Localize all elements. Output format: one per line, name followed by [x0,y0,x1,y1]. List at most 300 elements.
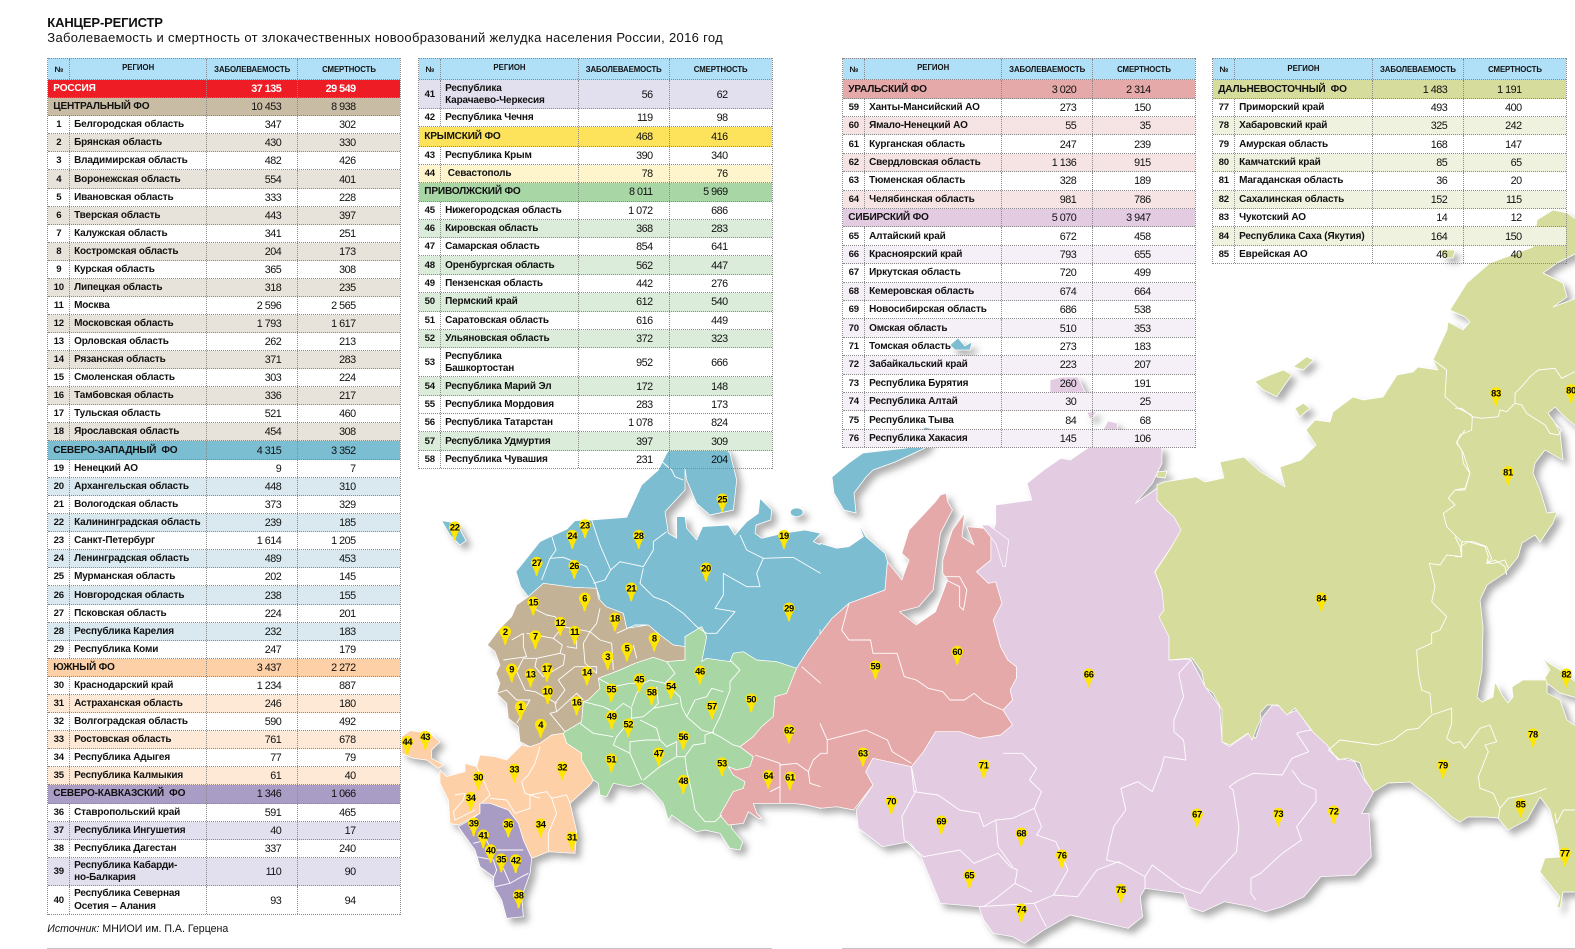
table: Russia, Central, Northwest, South, North Caucasus: 240 [339,843,356,855]
table: North Caucasus end, Crimea, Volga: 52 [425,333,435,344]
table: North Caucasus end, Crimea, Volga: 119 [637,112,653,124]
pin 22 [449,521,460,540]
table: Far East: 152 [1431,194,1447,206]
pin 68 [1016,827,1027,846]
pin 34 east: 34 [536,819,547,830]
heading: Crimean federal district: 416 [711,131,728,143]
table: Russia, Central, Northwest, South, North Caucasus: 24 [54,553,64,564]
column headers: РЕГИОН [917,63,949,72]
table: Russia, Central, Northwest, South, North Caucasus: 17 [54,408,64,419]
table: Ural and Siberia: Красноярский край [869,249,962,260]
table: North Caucasus end, Crimea, Volga: 1 072 [628,205,653,217]
table: North Caucasus end, Crimea, Volga: 686 [711,205,728,217]
table: Russia, Central, Northwest, South, North Caucasus: 1 234 [257,680,281,692]
table: Russia, Central, Northwest, South, North Caucasus: 37 [54,825,64,836]
table: North Caucasus end, Crimea, Volga: 442 [636,278,653,290]
table: Far East: Амурская область [1239,139,1328,150]
table: Russia, Central, Northwest, South, North Caucasus: 489 [265,553,281,565]
table: Russia, Central, Northwest, South, North Caucasus: 262 [265,336,281,348]
table: Ural and Siberia: 672 [1060,231,1076,243]
table: Russia, Central, Northwest, South, North Caucasus: 283 [339,354,356,366]
column headers [843,58,1195,80]
pin 8 [648,632,660,651]
table: North Caucasus end, Crimea, Volga: 43 [425,150,435,161]
table: Russia, Central, Northwest, South, North Caucasus: 40 [345,770,356,782]
pin 61 [784,771,796,790]
table: Russia, Central, Northwest, South, North Caucasus: 554 [265,174,281,186]
table: Russia, Central, Northwest, South, North Caucasus: Краснодарский край [74,680,173,691]
table: Russia, Central, Northwest, South, North Caucasus: 13 [54,336,64,347]
map regions [402,210,1575,943]
table: Russia, Central, Northwest, South, North Caucasus: 6 [56,210,61,221]
pin 23: 23 [580,519,590,530]
table: North Caucasus end, Crimea, Volga: 45 [425,205,435,216]
column headers: ЗАБОЛЕВАЕМОСТЬ [1380,65,1456,74]
pin 13 [525,668,536,687]
table: Russia, Central, Northwest, South, North Caucasus: Москва [74,300,110,311]
pin 3 [602,651,614,670]
table: Russia, Central, Northwest, South, North Caucasus: 38 [54,843,64,854]
table: Far East: 83 [1219,212,1229,223]
table: Russia, Central, Northwest, South, North Caucasus: Республика Дагестан [74,843,176,854]
pin 4: 4 [538,719,544,730]
pin 49 [606,710,618,729]
table: Russia, Central, Northwest, South, North Caucasus: 202 [265,571,281,583]
table: Ural and Siberia: 1 136 [1052,157,1076,169]
table: North Caucasus end, Crimea, Volga: Республика Татарстан [445,417,553,428]
region: Ural federal district [720,493,1016,825]
table: Ural and Siberia: 55 [1065,120,1076,132]
table: Ural and Siberia: Ханты-Мансийский АО [869,102,980,113]
table: Ural and Siberia: 273 [1060,341,1076,353]
pin 10: 10 [543,686,553,697]
pin 10 [542,685,554,704]
table: Ural and Siberia: 664 [1134,286,1151,298]
pin 38 [513,889,524,908]
table: Russia, Central, Northwest, South, North Caucasus: Калужская область [74,228,168,239]
table: Russia, Central, Northwest, South, North Caucasus: 2 565 [331,300,356,312]
heading: Central federal district: ЦЕНТРАЛЬНЫЙ ФО [53,101,149,112]
table: Russia, Central, Northwest, South, North Caucasus: 443 [265,210,281,222]
table: North Caucasus end, Crimea, Volga: Саратовская область [445,315,549,326]
pin 21: 21 [626,583,636,594]
pin 14: 14 [582,667,593,678]
pin 42 [510,854,522,873]
pin 65: 65 [964,870,974,881]
pin 9: 9 [509,664,514,675]
table: Ural and Siberia: Алтайский край [869,231,946,242]
pin 55 [606,683,617,702]
table: Far East [1212,58,1567,264]
table: Russia, Central, Northwest, South, North Caucasus: 33 [54,734,64,745]
table: North Caucasus end, Crimea, Volga: 854 [636,241,653,253]
heading: Central federal district: 8 938 [331,101,356,113]
table: Russia, Central, Northwest, South, North Caucasus: Московская область [74,318,173,329]
table: North Caucasus end, Crimea, Volga: 47 [425,241,435,252]
pin 69: 69 [936,816,946,827]
table: Far East: Сахалинская область [1239,194,1344,205]
table: Russia, Central, Northwest, South, North Caucasus: Ленинградская область [74,553,189,564]
pin 8: 8 [652,633,657,644]
table: Russia, Central, Northwest, South, North Caucasus: Республика Калмыкия [74,770,183,781]
table: North Caucasus end, Crimea, Volga: 231 [636,454,653,466]
table: Russia, Central, Northwest, South, North Caucasus: 329 [339,499,356,511]
table: Russia, Central, Northwest, South, North Caucasus: 8 [56,246,61,257]
pin 18 [609,612,621,631]
table: Russia, Central, Northwest, South, North Caucasus: 337 [265,843,281,855]
pin 69 [936,815,947,834]
table: Russia, Central, Northwest, South, North Caucasus: Курская область [74,264,155,275]
table: Far East: Хабаровский край [1239,120,1327,131]
column headers: ЗАБОЛЕВАЕМОСТЬ [214,65,290,74]
table: Russia, Central, Northwest, South, North Caucasus: 330 [339,137,356,149]
pin 67 [1191,808,1203,827]
table: Ural and Siberia: 915 [1134,157,1151,169]
pin 39 [468,817,480,836]
pin 34 east [535,818,547,837]
table: Far East: 84 [1219,231,1229,242]
table: Russia, Central, Northwest, South, North Caucasus: 238 [265,590,281,602]
pin 12 [554,617,566,636]
pin 2 [500,626,511,645]
pin 77 [1559,847,1571,866]
table: Russia, Central, Northwest, South, North Caucasus: Воронежская область [74,174,181,185]
pin 39: 39 [469,818,479,829]
table: Russia, Central, Northwest, South, North Caucasus: 333 [265,192,281,204]
table: Ural and Siberia: Новосибирская область [869,304,987,315]
table: Russia, Central, Northwest, South, North Caucasus: 453 [339,553,356,565]
column headers: СМЕРТНОСТЬ [1117,65,1171,74]
table: Russia, Central, Northwest, South, North Caucasus: 77 [270,752,281,764]
table: Russia, Central, Northwest, South, North Caucasus: Вологодская область [74,499,178,510]
pin 41: 41 [478,830,488,841]
table: Russia, Central, Northwest, South, North Caucasus: 401 [339,174,356,186]
table: Russia, Central, Northwest, South, North Caucasus: Белгородская область [74,119,184,130]
table: Russia, Central, Northwest, South, North Caucasus: 341 [265,228,281,240]
table: Russia, Central, Northwest, South, North Caucasus: 28 [54,626,64,637]
table: Russia, Central, Northwest, South, North Caucasus: Смоленская область [74,372,175,383]
table: Ural and Siberia: 70 [849,323,859,334]
pin 77: 77 [1560,848,1570,859]
column headers [1213,58,1566,80]
pin 76 [1056,849,1068,868]
table: Russia, Central, Northwest, South, North Caucasus: Ставропольский край [74,807,180,818]
pin 85 [1515,798,1526,817]
table: Russia, Central, Northwest, South, North Caucasus: 887 [339,680,356,692]
table: Far East: 46 [1436,249,1447,261]
pin 28: 28 [634,530,644,541]
table: Ural and Siberia: Ямало-Ненецкий АО [869,120,968,131]
table: Russia, Central, Northwest, South, North Caucasus: 308 [339,426,356,438]
table: North Caucasus end, Crimea, Volga: 340 [711,150,728,162]
pin 72: 72 [1329,806,1339,817]
heading: South federal district: ЮЖНЫЙ ФО [53,662,115,673]
table: Russia, Central, Northwest, South, North Caucasus: 460 [339,408,356,420]
table: Russia, Central, Northwest, South, North Caucasus: 235 [339,282,356,294]
pin 23 [579,519,591,538]
pin 82 [1560,668,1572,687]
table: Far East: 147 [1505,139,1522,151]
table: Ural and Siberia: 64 [849,194,859,205]
table: North Caucasus end, Crimea, Volga: 540 [711,296,728,308]
table: Ural and Siberia: Тюменская область [869,175,965,186]
table: Russia, Central, Northwest, South, North Caucasus: 183 [339,626,356,638]
pin 60: 60 [952,646,962,657]
table: Russia, Central, Northwest, South, North Caucasus: 308 [339,264,356,276]
table: Russia, Central, Northwest, South, North Caucasus: Тамбовская область [74,390,174,401]
table: North Caucasus end, Crimea, Volga: Башкортостан [445,363,514,374]
table: Ural and Siberia: 67 [849,267,859,278]
pin 26: 26 [569,560,579,571]
table: Russia, Central, Northwest, South, North Caucasus: 185 [339,517,356,529]
pin 46 [694,665,706,684]
column headers [48,58,400,80]
table: North Caucasus end, Crimea, Volga: 55 [425,399,435,410]
pin 51: 51 [606,754,616,765]
heading: Ural federal district [843,80,1195,99]
table: Russia, Central, Northwest, South, North Caucasus: 32 [54,716,64,727]
table: Russia, Central, Northwest, South, North Caucasus: 521 [265,408,281,420]
pin 32 [556,761,568,780]
table: Russia, Central, Northwest, South, North Caucasus: 36 [54,807,64,818]
table: Russia, Central, Northwest, South, North Caucasus: Архангельская область [74,481,189,492]
pin 1: 1 [518,701,523,712]
table: Russia, Central, Northwest, South, North Caucasus: 39 [54,866,64,877]
table: Ural and Siberia: 71 [849,341,859,352]
table: Ural and Siberia: 74 [849,396,859,407]
region borders [453,360,1575,927]
table: North Caucasus end, Crimea, Volga: 49 [425,278,435,289]
table: Russia, Central, Northwest, South, North Caucasus: 1 793 [257,318,281,330]
table: Russia, Central, Northwest, South, North Caucasus: 40 [270,825,281,837]
table: North Caucasus end, Crimea, Volga: 612 [636,296,653,308]
row: Russia total [48,80,400,98]
table: Russia, Central, Northwest, South, North Caucasus: 16 [54,390,64,401]
pin 33: 33 [509,764,519,775]
table: North Caucasus end, Crimea, Volga: 952 [636,357,653,369]
heading: Northwest federal district [48,441,400,460]
pin 6: 6 [582,593,587,604]
table: Ural and Siberia: Курганская область [869,139,965,150]
column headers: № [54,65,63,74]
table: Far East: 12 [1511,212,1522,224]
table: Far East: Магаданская область [1239,175,1343,186]
table: Russia, Central, Northwest, South, North Caucasus: 761 [265,734,281,746]
table: Russia, Central, Northwest, South, North Caucasus: 94 [345,895,356,907]
table: Ural and Siberia: 189 [1134,175,1151,187]
heading: Central federal district [48,98,400,116]
heading: Northwest federal district: СЕВЕРО-ЗАПАДНЫЙ ФО [53,445,177,456]
table: North Caucasus end, Crimea, Volga: 390 [636,150,653,162]
table: Russia, Central, Northwest, South, North Caucasus: Республика Коми [74,644,158,655]
table: Russia, Central, Northwest, South, North Caucasus: 34 [54,752,64,763]
table: Russia, Central, Northwest, South, North Caucasus: Республика Кабарди- [74,860,177,871]
column headers: РЕГИОН [122,63,154,72]
table: North Caucasus end, Crimea, Volga: 44 [425,168,435,179]
pin 52 [622,718,634,737]
table: North Caucasus end, Crimea, Volga: 50 [425,296,435,307]
table: Russia, Central, Northwest, South, North Caucasus: 1 614 [257,535,281,547]
pin 80 [1565,384,1575,403]
table: Ural and Siberia: Свердловская область [869,157,981,168]
pin 22: 22 [450,522,460,533]
table: Russia, Central, Northwest, South, North Caucasus: 1 [56,119,61,130]
pin 48: 48 [678,775,688,786]
table: Far East: 36 [1436,175,1447,187]
pin 47 [653,747,664,766]
table: Far East: 14 [1436,212,1447,224]
pin 55: 55 [606,684,616,695]
heading: North Caucasian federal district: 1 066 [331,788,356,800]
column headers: СМЕРТНОСТЬ [1488,65,1542,74]
table: Far East: 164 [1431,231,1447,243]
pin 70: 70 [886,796,896,807]
table: Russia, Central, Northwest, South, North Caucasus: 347 [265,119,281,131]
source note: Источник: МНИОИ им. П.А. Герцена [47,923,228,935]
pin 5: 5 [625,643,630,654]
pin 50 [746,693,757,712]
heading: North Caucasian federal district: СЕВЕРО-КАВКАЗСКИЙ ФО [53,788,185,799]
pin 14 [581,666,593,685]
table: Russia, Central, Northwest, South, North Caucasus: Республика Адыгея [74,752,170,763]
table: Russia, Central, Northwest, South, North Caucasus: 246 [265,698,281,710]
heading: Volga federal district: 8 011 [629,186,653,198]
pin 36: 36 [503,819,513,830]
table: North Caucasus end, Crimea, Volga: 51 [425,315,435,326]
table: Russia, Central, Northwest, South, North Caucasus: Ярославская область [74,426,179,437]
table: Far East: Приморский край [1239,102,1324,113]
table: Russia, Central, Northwest, South, North Caucasus: 19 [54,463,64,474]
pin 62 [783,724,795,743]
table: Far East: 150 [1505,231,1522,243]
region: Central federal district [487,583,685,747]
column headers: № [849,65,858,74]
heading: Siberian federal district: СИБИРСКИЙ ФО [848,212,929,223]
table: North Caucasus end, Crimea, Volga: Пермский край [445,296,518,307]
pin 63 [857,747,869,766]
table: North Caucasus end, Crimea, Volga: 562 [636,260,653,272]
pin 7: 7 [533,630,538,641]
table: Ural and Siberia: Челябинская область [869,194,975,205]
table: Ural and Siberia: 106 [1134,433,1151,445]
table: North Caucasus end, Crimea, Volga: 53 [425,357,435,368]
heading: Siberian federal district: 5 070 [1052,212,1076,224]
table: North Caucasus end, Crimea, Volga: 172 [636,381,653,393]
pin 15: 15 [528,597,538,608]
pin 43: 43 [420,731,430,742]
table: Far East: 85 [1436,157,1447,169]
table: Ural and Siberia: 69 [849,304,859,315]
table: Russia, Central, Northwest, South, North Caucasus: 27 [54,608,64,619]
table: Russia, Central, Northwest, South, North Caucasus: 11 [54,300,64,311]
table: North Caucasus end, Crimea, Volga: Нижегородская область [445,205,562,216]
table: Ural and Siberia: 72 [849,359,859,370]
table: Ural and Siberia: 66 [849,249,859,260]
table: Far East: Республика Саха (Якутия) [1239,231,1365,242]
table: North Caucasus end, Crimea, Volga: 42 [425,112,435,123]
table: Ural and Siberia [842,58,1196,448]
pin 79: 79 [1438,760,1448,771]
pin 24 [566,530,578,549]
table: Ural and Siberia: 538 [1134,304,1151,316]
numbered map pins [402,384,1575,922]
pin 42: 42 [511,854,521,865]
table: Ural and Siberia: Омская область [869,323,947,334]
table: North Caucasus end, Crimea, Volga [418,58,773,469]
table: North Caucasus end, Crimea, Volga: 666 [711,357,728,369]
table: North Caucasus end, Crimea, Volga: 76 [717,168,728,180]
pin 11 [569,626,580,645]
table: Ural and Siberia: 793 [1060,249,1076,261]
column headers: № [425,65,434,74]
table: Russia, Central, Northwest, South, North Caucasus: 20 [54,481,64,492]
table: Russia, Central, Northwest, South, North Caucasus: Псковская область [74,608,166,619]
column headers: № [1219,65,1228,74]
table: North Caucasus end, Crimea, Volga: Республика Чувашия [445,454,548,465]
table: North Caucasus end, Crimea, Volga: 283 [636,399,653,411]
pin 45: 45 [634,674,644,685]
table: North Caucasus end, Crimea, Volga: 62 [717,89,728,101]
table: Russia, Central, Northwest, South, North Caucasus: Калининградская область [74,517,201,528]
table: Ural and Siberia: 59 [849,102,859,113]
table: Ural and Siberia: 30 [1065,396,1076,408]
pin 74 [1016,903,1027,922]
table: Russia, Central, Northwest, South, North Caucasus: 228 [339,192,356,204]
table: Russia, Central, Northwest, South, North Caucasus: 239 [265,517,281,529]
region: Siberian federal district [856,377,1374,943]
table: Russia, Central, Northwest, South, North Caucasus: 4 [56,174,61,185]
heading: South federal district [48,659,400,677]
pin 45 [634,673,645,692]
column headers: СМЕРТНОСТЬ [694,65,748,74]
table: Ural and Siberia: 239 [1134,139,1151,151]
table: Ural and Siberia: 353 [1134,323,1151,335]
table: Russia, Central, Northwest, South, North Caucasus: 224 [339,372,356,384]
pin 44: 44 [402,736,413,747]
table: Russia, Central, Northwest, South, North Caucasus: Липецкая область [74,282,162,293]
table: Ural and Siberia: 207 [1134,359,1151,371]
table: Russia, Central, Northwest, South, North Caucasus: Ивановская область [74,192,174,203]
table: North Caucasus end, Crimea, Volga: 283 [711,223,728,235]
pin 60 [951,646,963,665]
heading: Siberian federal district [843,209,1195,227]
title: КАНЦЕР-РЕГИСТР [47,14,163,30]
pin 83 [1490,387,1502,406]
table: Ural and Siberia: 68 [1140,415,1151,427]
pin 19 [778,530,790,549]
row: Russia total: РОССИЯ [53,83,96,94]
pin 81 [1502,466,1514,485]
table: Russia, Central, Northwest, South, North Caucasus: 232 [265,626,281,638]
table: North Caucasus end, Crimea, Volga: 41 [425,89,435,100]
pin 17 [541,663,553,682]
table: Far East: Камчатский край [1239,157,1321,168]
pin 66 [1083,668,1094,687]
table: Russia, Central, Northwest, South, North Caucasus: Волгоградская область [74,716,188,727]
pin 35 [496,853,507,872]
table: Russia, Central, Northwest, South, North Caucasus: Костромская область [74,246,178,257]
table: Russia, Central, Northwest, South, North Caucasus: Новгородская область [74,590,184,601]
heading: Central federal district: 10 453 [251,101,281,113]
table: Ural and Siberia: 62 [849,157,859,168]
table: Far East: 79 [1219,139,1229,150]
table: Russia, Central, Northwest, South, North Caucasus: 10 [54,282,64,293]
table: Ural and Siberia: 183 [1134,341,1151,353]
table: Russia, Central, Northwest, South, North Caucasus: 31 [54,698,64,709]
heading: Ural federal district: 3 020 [1052,84,1076,96]
table: North Caucasus end, Crimea, Volga: 56 [642,89,653,101]
heading: South federal district: 3 437 [257,662,281,674]
